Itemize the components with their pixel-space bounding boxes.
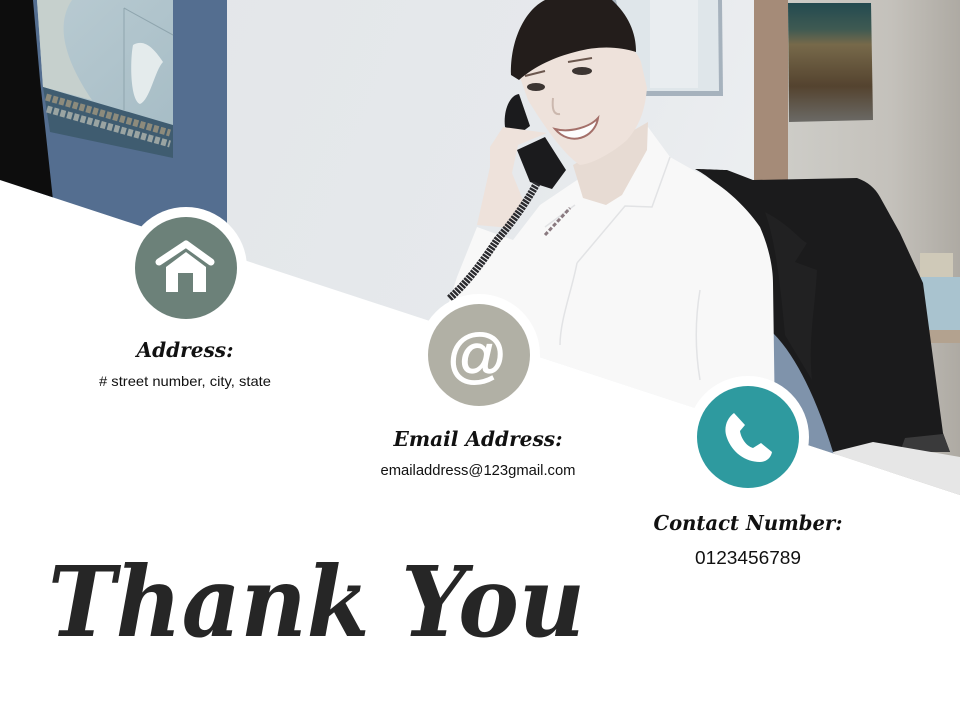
white shirt xyxy=(440,127,775,425)
email detail: emailaddress@123gmail.com xyxy=(380,463,576,479)
email heading: Email Address: xyxy=(393,427,562,451)
icon: email at sign xyxy=(418,294,540,416)
coiled phone cord xyxy=(449,183,537,299)
smile xyxy=(555,118,598,139)
shirt shading xyxy=(545,157,700,380)
hand xyxy=(477,127,547,228)
photo: woman on the phone in an office xyxy=(0,0,960,500)
nose shadow xyxy=(553,98,560,114)
icon: address house xyxy=(125,207,247,329)
phone handset xyxy=(505,94,566,189)
black jacket xyxy=(695,169,950,452)
icon: email at sign: @ xyxy=(447,322,507,389)
address heading: Address: xyxy=(135,338,234,362)
back room wall xyxy=(788,0,960,500)
chair back xyxy=(774,334,836,454)
office wall xyxy=(227,0,754,320)
door frame xyxy=(754,0,788,180)
desk foreground xyxy=(833,442,960,500)
contact number: 0123456789 xyxy=(695,547,801,568)
desk items at right xyxy=(920,253,960,343)
icon: phone xyxy=(687,376,809,498)
jacket lapel highlight xyxy=(765,212,817,380)
neck xyxy=(573,122,648,205)
wall map xyxy=(37,0,173,158)
title: Thank You xyxy=(48,545,585,659)
hair xyxy=(511,0,636,80)
shirt stripe xyxy=(545,208,570,235)
address detail: # street number, city, state xyxy=(99,373,271,389)
blue wall panel xyxy=(30,0,227,240)
picture frame behind woman xyxy=(610,0,723,96)
painting xyxy=(788,3,873,122)
contact heading: Contact Number: xyxy=(654,511,842,535)
eyes xyxy=(525,58,592,91)
dark monitor edge xyxy=(0,0,53,200)
jacket sleeve cuff xyxy=(900,434,950,452)
face xyxy=(520,48,647,162)
